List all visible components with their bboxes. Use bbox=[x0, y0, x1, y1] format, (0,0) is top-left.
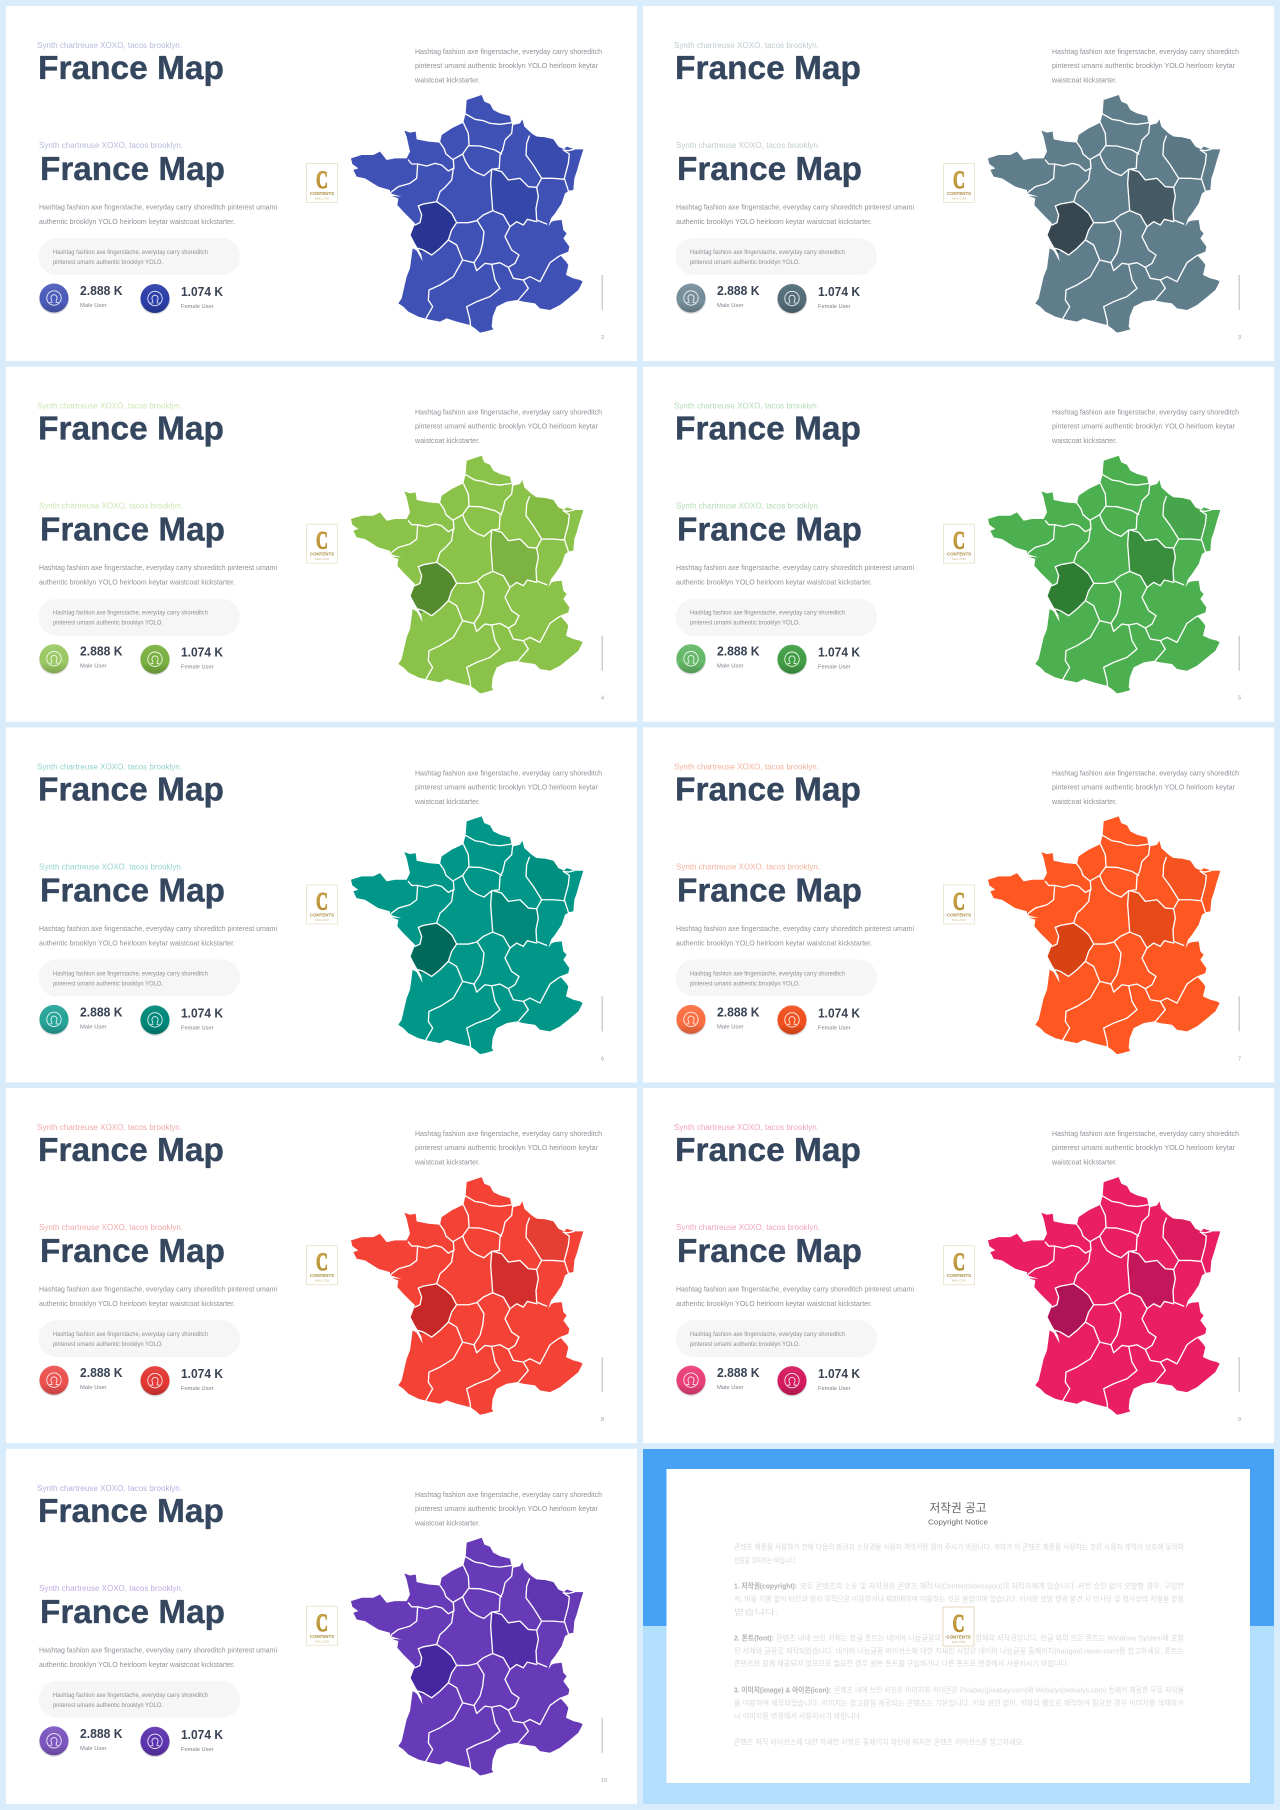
copyright body text: 콘텐츠와 함께 제공되지 않으므로 필요한 경우 원본 폰트를 구입하거나 다른 폰트로 변경해서 사용하시기 바랍니다. bbox=[734, 1659, 1069, 1668]
logo badge: C bbox=[316, 528, 328, 555]
page marker: 2 bbox=[601, 335, 604, 341]
callout pill: purple: Hashtag fashion axe fingerstache, everyday carry shoreditch bbox=[53, 1693, 208, 1699]
intro text: blue: pinterest umami authentic brooklyn YOLO heirloom keytar bbox=[415, 61, 599, 70]
top heading: blue: Synth chartreuse XOXO, tacos brooklyn. bbox=[37, 40, 182, 50]
logo badge: MAIL.COM bbox=[315, 196, 330, 200]
stat: male user: Male User bbox=[80, 664, 107, 670]
intro text: light green: waistcoat kickstarter. bbox=[414, 436, 480, 445]
logo badge: MAIL.COM bbox=[952, 557, 967, 561]
page marker bbox=[601, 275, 604, 341]
callout pill: slate: pinterest umami authentic brooklyn YOLO. bbox=[690, 260, 800, 266]
top heading: green: France Map bbox=[675, 411, 861, 448]
second heading: green: Synth chartreuse XOXO, tacos brooklyn. bbox=[676, 501, 820, 511]
stat: female user: 1.074 K bbox=[818, 1006, 860, 1020]
stat: male user: 2.888 K bbox=[80, 1366, 122, 1380]
intro text: teal: waistcoat kickstarter. bbox=[414, 797, 480, 806]
callout pill: green: pinterest umami authentic brooklyn YOLO. bbox=[690, 621, 800, 627]
description: red: Hashtag fashion axe fingerstache, everyday carry shoreditch pinterest umami bbox=[39, 1285, 277, 1294]
copyright heading: Copyright Notice bbox=[928, 1518, 988, 1526]
logo badge: CONTENTS bbox=[946, 1634, 971, 1640]
map of France: teal bbox=[351, 816, 583, 1054]
stat: female user bbox=[777, 284, 860, 314]
description: teal bbox=[39, 924, 277, 947]
stat: male user: Male User bbox=[80, 1024, 107, 1030]
second heading: blue: Synth chartreuse XOXO, tacos brooklyn. bbox=[39, 140, 183, 150]
intro text: blue: waistcoat kickstarter. bbox=[414, 76, 480, 84]
logo badge: C bbox=[953, 1249, 965, 1276]
intro text: red: Hashtag fashion axe fingerstache, everyday carry shoreditch bbox=[415, 1129, 602, 1138]
logo badge: CONTENTS bbox=[310, 191, 334, 196]
logo badge: C bbox=[316, 1249, 328, 1276]
stat: male user bbox=[39, 1005, 122, 1035]
page marker bbox=[601, 996, 604, 1062]
callout pill: purple: pinterest umami authentic brooklyn YOLO. bbox=[53, 1703, 163, 1709]
top heading: pink: France Map bbox=[675, 1132, 861, 1169]
second heading: purple: Synth chartreuse XOXO, tacos brooklyn. bbox=[39, 1583, 183, 1593]
stat: male user: 2.888 K bbox=[80, 284, 122, 298]
stat: female user bbox=[140, 1005, 223, 1036]
callout pill: pink bbox=[676, 1320, 877, 1357]
copyright body text: 된 서체와 글꼴로 제작되었습니다. 네이버 나눔글꼴 라이선스에 대한 자세한 사항은 네이버 나눔글꼴 홈페이지(hangeul.naver.com)를 참고하세요. 폰트는 bbox=[734, 1646, 1184, 1656]
logo badge: MAIL.COM bbox=[952, 1279, 967, 1283]
stat: male user: Male User bbox=[717, 1024, 744, 1030]
intro text: green bbox=[1051, 408, 1239, 445]
second heading: purple: France Map bbox=[40, 1594, 225, 1631]
logo badge: C bbox=[953, 888, 965, 915]
stat: male user bbox=[676, 644, 760, 675]
top heading: orange: France Map bbox=[675, 771, 861, 808]
logo badge bbox=[306, 1606, 338, 1645]
copyright heading: 저작권 공고 bbox=[930, 1501, 986, 1515]
stat: female user: 1.074 K bbox=[181, 285, 223, 299]
copyright body text: 을 이용하여 제작되었습니다. 이미지는 참고용일 제공되는 콘텐츠는 기본입니다. 이와 관련 없이, 귀하의 별도로 제작하여 필요한 경우 이미지를 삭제하거 bbox=[734, 1698, 1184, 1708]
intro text: orange: pinterest umami authentic brooklyn YOLO heirloom keytar bbox=[1052, 782, 1236, 791]
intro text: slate: waistcoat kickstarter. bbox=[1051, 76, 1117, 84]
stat: male user: 2.888 K bbox=[717, 1366, 760, 1380]
second heading: orange: France Map bbox=[677, 872, 862, 909]
description: light green: authentic brooklyn YOLO heirloom keytar waistcoat kickstarter. bbox=[39, 578, 235, 587]
second heading: red: France Map bbox=[40, 1233, 225, 1270]
page marker bbox=[1238, 636, 1241, 702]
description: teal: authentic brooklyn YOLO heirloom keytar waistcoat kickstarter. bbox=[39, 938, 235, 947]
description: green: Hashtag fashion axe fingerstache, everyday carry shoreditch pinterest umami bbox=[676, 563, 914, 572]
description: blue bbox=[39, 202, 277, 226]
logo badge bbox=[944, 524, 974, 563]
logo badge bbox=[306, 524, 338, 563]
stat: female user: Female User bbox=[181, 665, 214, 671]
stat: male user: Male User bbox=[717, 303, 744, 309]
logo badge: C bbox=[316, 888, 328, 915]
logo badge: CONTENTS bbox=[310, 552, 334, 557]
callout pill: light green: Hashtag fashion axe fingerstache, everyday carry shoreditch bbox=[53, 611, 208, 617]
callout pill: green bbox=[676, 599, 877, 636]
intro text: slate: pinterest umami authentic brooklyn YOLO heirloom keytar bbox=[1052, 61, 1236, 70]
second heading: teal: France Map bbox=[40, 872, 225, 909]
description: slate bbox=[676, 202, 914, 226]
intro text: purple: Hashtag fashion axe fingerstache, everyday carry shoreditch bbox=[415, 1490, 602, 1499]
panel: copyright notice bbox=[643, 1449, 1274, 1804]
stat: male user bbox=[676, 1005, 760, 1035]
second heading: slate: Synth chartreuse XOXO, tacos brooklyn. bbox=[676, 140, 820, 150]
stat: male user: 2.888 K bbox=[717, 1005, 760, 1019]
logo badge: MAIL.COM bbox=[952, 196, 967, 200]
stat: male user: 2.888 K bbox=[717, 284, 760, 298]
callout pill: orange: pinterest umami authentic brooklyn YOLO. bbox=[690, 981, 800, 987]
description: red bbox=[39, 1285, 277, 1308]
logo badge: MAIL.COM bbox=[315, 557, 330, 561]
intro text: purple: pinterest umami authentic brooklyn YOLO heirloom keytar bbox=[415, 1504, 599, 1513]
stat: female user bbox=[777, 1005, 860, 1036]
stat: male user: Male User bbox=[80, 1746, 107, 1752]
logo badge: MAIL.COM bbox=[952, 918, 967, 922]
stat: male user: Male User bbox=[717, 664, 744, 670]
description: orange: authentic brooklyn YOLO heirloom keytar waistcoat kickstarter. bbox=[676, 938, 872, 947]
top heading: slate: France Map bbox=[675, 50, 861, 87]
stat: female user: Female User bbox=[181, 1025, 214, 1031]
stat: female user: Female User bbox=[818, 665, 851, 671]
description: purple bbox=[39, 1645, 277, 1669]
stat: male user: 2.888 K bbox=[717, 645, 760, 659]
stat: male user: 2.888 K bbox=[80, 1005, 122, 1019]
stat: male user: Male User bbox=[80, 303, 107, 309]
top heading: orange: Synth chartreuse XOXO, tacos brooklyn. bbox=[674, 761, 819, 771]
intro text: light green: Hashtag fashion axe fingerstache, everyday carry shoreditch bbox=[415, 408, 602, 417]
description: orange bbox=[676, 924, 914, 947]
stat: male user bbox=[39, 1726, 122, 1757]
top heading: light green: Synth chartreuse XOXO, tacos brooklyn. bbox=[37, 401, 182, 411]
description: purple: Hashtag fashion axe fingerstache, everyday carry shoreditch pinterest umami bbox=[39, 1645, 277, 1654]
description: pink: authentic brooklyn YOLO heirloom keytar waistcoat kickstarter. bbox=[676, 1299, 872, 1308]
second heading: light green: Synth chartreuse XOXO, tacos brooklyn. bbox=[39, 501, 183, 511]
second heading: teal: Synth chartreuse XOXO, tacos brooklyn. bbox=[39, 861, 183, 871]
stat: male user: Male User bbox=[717, 1385, 744, 1391]
copyright body text: 모든 콘텐츠의 소유 및 저작권은 콘텐츠 제작사(Contentslovesyou)의 저작자에게 있습니다. 사전 승인 없이 모방할 경우, 구입한 bbox=[800, 1582, 1184, 1590]
stat: female user: 1.074 K bbox=[818, 646, 860, 660]
intro text: purple: waistcoat kickstarter. bbox=[414, 1518, 480, 1527]
page marker: 8 bbox=[601, 1417, 604, 1423]
intro text: teal: Hashtag fashion axe fingerstache, everyday carry shoreditch bbox=[415, 768, 602, 777]
stat: male user bbox=[39, 284, 122, 314]
map of France: blue bbox=[351, 95, 583, 333]
intro text: orange bbox=[1051, 768, 1239, 806]
callout pill: pink: pinterest umami authentic brooklyn YOLO. bbox=[690, 1342, 800, 1348]
copyright body text: 받습니다. bbox=[734, 1608, 778, 1616]
logo badge: MAIL.COM bbox=[952, 1640, 966, 1644]
callout pill: teal: pinterest umami authentic brooklyn YOLO. bbox=[53, 981, 163, 987]
description: green bbox=[676, 563, 914, 587]
logo badge: CONTENTS bbox=[947, 191, 971, 196]
page marker bbox=[601, 1357, 604, 1423]
top heading: slate: Synth chartreuse XOXO, tacos brooklyn. bbox=[674, 40, 819, 50]
description: slate: Hashtag fashion axe fingerstache, everyday carry shoreditch pinterest umami bbox=[676, 202, 914, 212]
top heading: green: Synth chartreuse XOXO, tacos brooklyn. bbox=[674, 401, 819, 411]
map of France: orange bbox=[988, 816, 1220, 1054]
logo badge: CONTENTS bbox=[310, 912, 334, 917]
stat: female user: 1.074 K bbox=[818, 1367, 860, 1381]
stat: female user bbox=[140, 645, 223, 675]
callout pill: pink: Hashtag fashion axe fingerstache, everyday carry shoreditch bbox=[690, 1332, 845, 1338]
intro text: purple bbox=[414, 1490, 602, 1527]
second heading: green: France Map bbox=[677, 512, 862, 549]
logo badge bbox=[306, 1246, 338, 1285]
logo badge bbox=[943, 1607, 974, 1646]
page marker: 9 bbox=[1238, 1417, 1241, 1423]
copyright body text: 콘텐츠 저작 라이선스에 대한 자세한 사항은 홈페이지 하단에 위치한 콘텐츠 라이선스를 참고하세요. bbox=[734, 1738, 1024, 1746]
page marker: 10 bbox=[601, 1778, 607, 1784]
stat: female user: 1.074 K bbox=[818, 285, 860, 299]
stat: female user bbox=[777, 645, 860, 675]
stat: male user: 2.888 K bbox=[80, 1727, 122, 1741]
callout pill: red: Hashtag fashion axe fingerstache, everyday carry shoreditch bbox=[53, 1332, 208, 1338]
second heading: slate: France Map bbox=[677, 151, 862, 188]
intro text: pink bbox=[1051, 1129, 1239, 1167]
top heading: pink: Synth chartreuse XOXO, tacos brooklyn. bbox=[674, 1122, 819, 1132]
second heading: blue: France Map bbox=[40, 151, 225, 188]
copyright body text: 1. 저작권(copyright): bbox=[734, 1582, 797, 1590]
description: blue: Hashtag fashion axe fingerstache, everyday carry shoreditch pinterest umami bbox=[39, 202, 277, 212]
top heading: red: Synth chartreuse XOXO, tacos brooklyn. bbox=[37, 1122, 182, 1132]
logo badge bbox=[944, 885, 974, 924]
panel: teal slide bbox=[6, 727, 637, 1082]
stat: female user bbox=[777, 1366, 860, 1397]
callout pill: orange: Hashtag fashion axe fingerstache, everyday carry shoreditch bbox=[690, 971, 845, 977]
stat: female user: 1.074 K bbox=[181, 1006, 223, 1020]
intro text: pink: waistcoat kickstarter. bbox=[1051, 1158, 1117, 1167]
logo badge: C bbox=[316, 167, 328, 194]
logo badge: MAIL.COM bbox=[315, 1639, 330, 1643]
copyright body text: 3. 이미지(image) & 아이콘(icon): bbox=[734, 1686, 831, 1694]
top heading: teal: France Map bbox=[38, 771, 224, 808]
callout pill: teal: Hashtag fashion axe fingerstache, everyday carry shoreditch bbox=[53, 971, 208, 977]
callout pill: green: Hashtag fashion axe fingerstache, everyday carry shoreditch bbox=[690, 611, 845, 617]
panel: purple slide bbox=[6, 1449, 637, 1804]
intro text: green: waistcoat kickstarter. bbox=[1051, 436, 1117, 445]
intro text: teal: pinterest umami authentic brooklyn YOLO heirloom keytar bbox=[415, 782, 599, 791]
page marker: 3 bbox=[1238, 335, 1241, 341]
description: pink: Hashtag fashion axe fingerstache, everyday carry shoreditch pinterest umami bbox=[676, 1285, 914, 1294]
stat: female user bbox=[140, 1727, 223, 1757]
logo badge bbox=[944, 1246, 974, 1285]
callout pill: red: pinterest umami authentic brooklyn YOLO. bbox=[53, 1342, 163, 1348]
description: red: authentic brooklyn YOLO heirloom keytar waistcoat kickstarter. bbox=[39, 1299, 235, 1308]
stat: female user: 1.074 K bbox=[181, 1367, 223, 1381]
intro text: light green: pinterest umami authentic brooklyn YOLO heirloom keytar bbox=[415, 422, 599, 431]
intro text: green: pinterest umami authentic brooklyn YOLO heirloom keytar bbox=[1052, 422, 1236, 431]
page marker bbox=[601, 1718, 607, 1784]
page marker: 5 bbox=[1238, 696, 1241, 702]
callout pill: teal bbox=[38, 959, 240, 996]
page marker bbox=[1238, 1357, 1241, 1423]
description: purple: authentic brooklyn YOLO heirloom keytar waistcoat kickstarter. bbox=[39, 1660, 235, 1669]
panel: light green slide bbox=[6, 367, 637, 722]
logo badge bbox=[306, 164, 338, 202]
copyright body text: 나 이미지를 변경해서 사용하시기 바랍니다. bbox=[734, 1712, 862, 1720]
stat: male user bbox=[39, 644, 122, 675]
copyright heading bbox=[928, 1501, 988, 1526]
map of France: light green bbox=[351, 456, 583, 693]
top heading: purple: Synth chartreuse XOXO, tacos brooklyn. bbox=[37, 1483, 182, 1493]
intro text: red: pinterest umami authentic brooklyn YOLO heirloom keytar bbox=[415, 1143, 599, 1152]
panel: green slide bbox=[643, 367, 1274, 722]
stat: male user bbox=[676, 284, 760, 314]
logo badge: C bbox=[952, 1610, 964, 1638]
callout pill: slate: Hashtag fashion axe fingerstache, everyday carry shoreditch bbox=[690, 250, 845, 256]
logo badge bbox=[944, 164, 974, 202]
logo badge bbox=[306, 885, 338, 924]
top heading: teal: Synth chartreuse XOXO, tacos brooklyn. bbox=[37, 761, 182, 771]
intro text: green: Hashtag fashion axe fingerstache, everyday carry shoreditch bbox=[1052, 408, 1239, 417]
stat: female user: Female User bbox=[181, 1386, 214, 1392]
callout pill: blue: pinterest umami authentic brooklyn YOLO. bbox=[53, 260, 163, 266]
stat: female user: 1.074 K bbox=[181, 1728, 223, 1742]
stat: female user: Female User bbox=[181, 1747, 214, 1753]
callout pill: purple bbox=[38, 1681, 240, 1718]
second heading: orange: Synth chartreuse XOXO, tacos brooklyn. bbox=[676, 861, 820, 871]
description: slate: authentic brooklyn YOLO heirloom keytar waistcoat kickstarter. bbox=[676, 217, 872, 226]
copyright body text: 콘텐츠 내에 쓰인 사진은 이미지와 아이콘은 Pixabay(pixabay.com)와 Webalys(webalys.com) 등에서 제공한 무료 저작물 bbox=[834, 1686, 1184, 1694]
logo badge: CONTENTS bbox=[947, 1273, 971, 1278]
intro text: red: waistcoat kickstarter. bbox=[414, 1158, 480, 1167]
description: light green bbox=[39, 563, 277, 587]
stat: female user: Female User bbox=[818, 304, 851, 310]
intro text: light green bbox=[414, 408, 602, 445]
page marker bbox=[601, 636, 604, 702]
map of France: purple bbox=[351, 1538, 583, 1775]
logo badge: C bbox=[316, 1610, 328, 1637]
callout pill: light green bbox=[38, 599, 240, 636]
logo badge: C bbox=[953, 167, 965, 194]
intro text: pink: Hashtag fashion axe fingerstache, everyday carry shoreditch bbox=[1052, 1129, 1239, 1138]
stat: male user: Male User bbox=[80, 1385, 107, 1391]
logo badge: C bbox=[953, 528, 965, 555]
description: pink bbox=[676, 1285, 914, 1308]
stat: female user: 1.074 K bbox=[181, 646, 223, 660]
map of France: slate bbox=[988, 95, 1220, 333]
logo badge: CONTENTS bbox=[310, 1634, 334, 1639]
description: green: authentic brooklyn YOLO heirloom keytar waistcoat kickstarter. bbox=[676, 578, 872, 587]
intro text: orange: Hashtag fashion axe fingerstache, everyday carry shoreditch bbox=[1052, 768, 1239, 777]
intro text: orange: waistcoat kickstarter. bbox=[1051, 797, 1117, 806]
stat: male user bbox=[39, 1366, 122, 1396]
stat: female user: Female User bbox=[818, 1025, 851, 1031]
intro text: teal bbox=[414, 768, 602, 806]
description: light green: Hashtag fashion axe fingerstache, everyday carry shoreditch pinterest umami bbox=[39, 563, 277, 572]
stat: female user bbox=[140, 1366, 223, 1397]
callout pill: orange bbox=[676, 959, 877, 996]
second heading: pink: France Map bbox=[677, 1233, 862, 1270]
callout pill: slate bbox=[676, 238, 877, 275]
description: orange: Hashtag fashion axe fingerstache, everyday carry shoreditch pinterest umami bbox=[676, 924, 914, 933]
panel: blue slide bbox=[6, 6, 637, 361]
intro text: blue bbox=[414, 47, 602, 84]
copyright body text: 셨음을 의미하는 바입니다. bbox=[734, 1556, 797, 1565]
intro text: blue: Hashtag fashion axe fingerstache, everyday carry shoreditch bbox=[415, 47, 602, 56]
intro text: red bbox=[414, 1129, 602, 1167]
callout pill: blue bbox=[38, 238, 240, 275]
logo badge: MAIL.COM bbox=[315, 918, 330, 922]
logo badge: CONTENTS bbox=[310, 1273, 334, 1278]
copyright body text: 자, 비용 지불 없이 타인과 영리 목적으로 이용하거나 재판매하여 이용하는 것은 불법이며 있습니다. 이러한 모방 행위 발견 시 민사상 및 형사상의 처벌을 받을 bbox=[734, 1594, 1184, 1604]
stat: female user: Female User bbox=[181, 304, 214, 310]
second heading: red: Synth chartreuse XOXO, tacos brooklyn. bbox=[39, 1222, 183, 1232]
page marker bbox=[1238, 275, 1241, 341]
description: teal: Hashtag fashion axe fingerstache, everyday carry shoreditch pinterest umami bbox=[39, 924, 277, 933]
stat: female user: Female User bbox=[818, 1386, 851, 1392]
intro text: slate: Hashtag fashion axe fingerstache, everyday carry shoreditch bbox=[1052, 47, 1239, 56]
stat: male user: 2.888 K bbox=[80, 645, 122, 659]
map of France: green bbox=[988, 456, 1220, 693]
copyright body text: 2. 폰트(font): bbox=[734, 1634, 774, 1642]
map of France: red bbox=[351, 1177, 583, 1415]
logo badge: MAIL.COM bbox=[315, 1279, 330, 1283]
page marker bbox=[1238, 996, 1241, 1062]
logo badge: CONTENTS bbox=[947, 912, 971, 917]
panel: red slide bbox=[6, 1088, 637, 1443]
panel: orange slide bbox=[643, 727, 1274, 1082]
intro text: slate bbox=[1051, 47, 1239, 84]
map of France: pink bbox=[988, 1177, 1220, 1415]
top heading: red: France Map bbox=[38, 1132, 224, 1169]
top heading: light green: France Map bbox=[38, 411, 224, 448]
page marker: 4 bbox=[601, 696, 604, 702]
callout pill: blue: Hashtag fashion axe fingerstache, everyday carry shoreditch bbox=[53, 250, 208, 256]
copyright body text: 콘텐츠 제품을 사용하기 전에 다음의 판권과 소유권을 사용자 계약서를 읽어 주시기 바랍니다. 귀하가 이 콘텐츠 제품을 사용하는 것은 사용자 계약서 보호에 동의하 bbox=[734, 1542, 1184, 1552]
copyright body text: 콘텐츠 내에 쓰인 서체는 한글 폰트는 네이버 나눔글꼴의 서체 및 타 업체의 저작권입니다. 한글 외의 모든 폰트는 Windows System에 포함 bbox=[776, 1634, 1184, 1642]
logo badge: CONTENTS bbox=[947, 552, 971, 557]
stat: male user bbox=[676, 1366, 760, 1396]
callout pill: red bbox=[38, 1320, 240, 1357]
second heading: light green: France Map bbox=[40, 512, 225, 549]
top heading: purple: France Map bbox=[38, 1493, 224, 1530]
panel: pink slide bbox=[643, 1088, 1274, 1443]
stat: female user bbox=[140, 284, 223, 314]
page marker: 6 bbox=[601, 1056, 604, 1062]
second heading: pink: Synth chartreuse XOXO, tacos brooklyn. bbox=[676, 1222, 820, 1232]
description: blue: authentic brooklyn YOLO heirloom keytar waistcoat kickstarter. bbox=[39, 217, 235, 226]
page marker: 7 bbox=[1238, 1056, 1241, 1062]
top heading: blue: France Map bbox=[38, 50, 224, 87]
panel: slate slide bbox=[643, 6, 1274, 361]
intro text: pink: pinterest umami authentic brooklyn YOLO heirloom keytar bbox=[1052, 1143, 1236, 1152]
callout pill: light green: pinterest umami authentic brooklyn YOLO. bbox=[53, 621, 163, 627]
copyright body text bbox=[734, 1542, 1184, 1746]
